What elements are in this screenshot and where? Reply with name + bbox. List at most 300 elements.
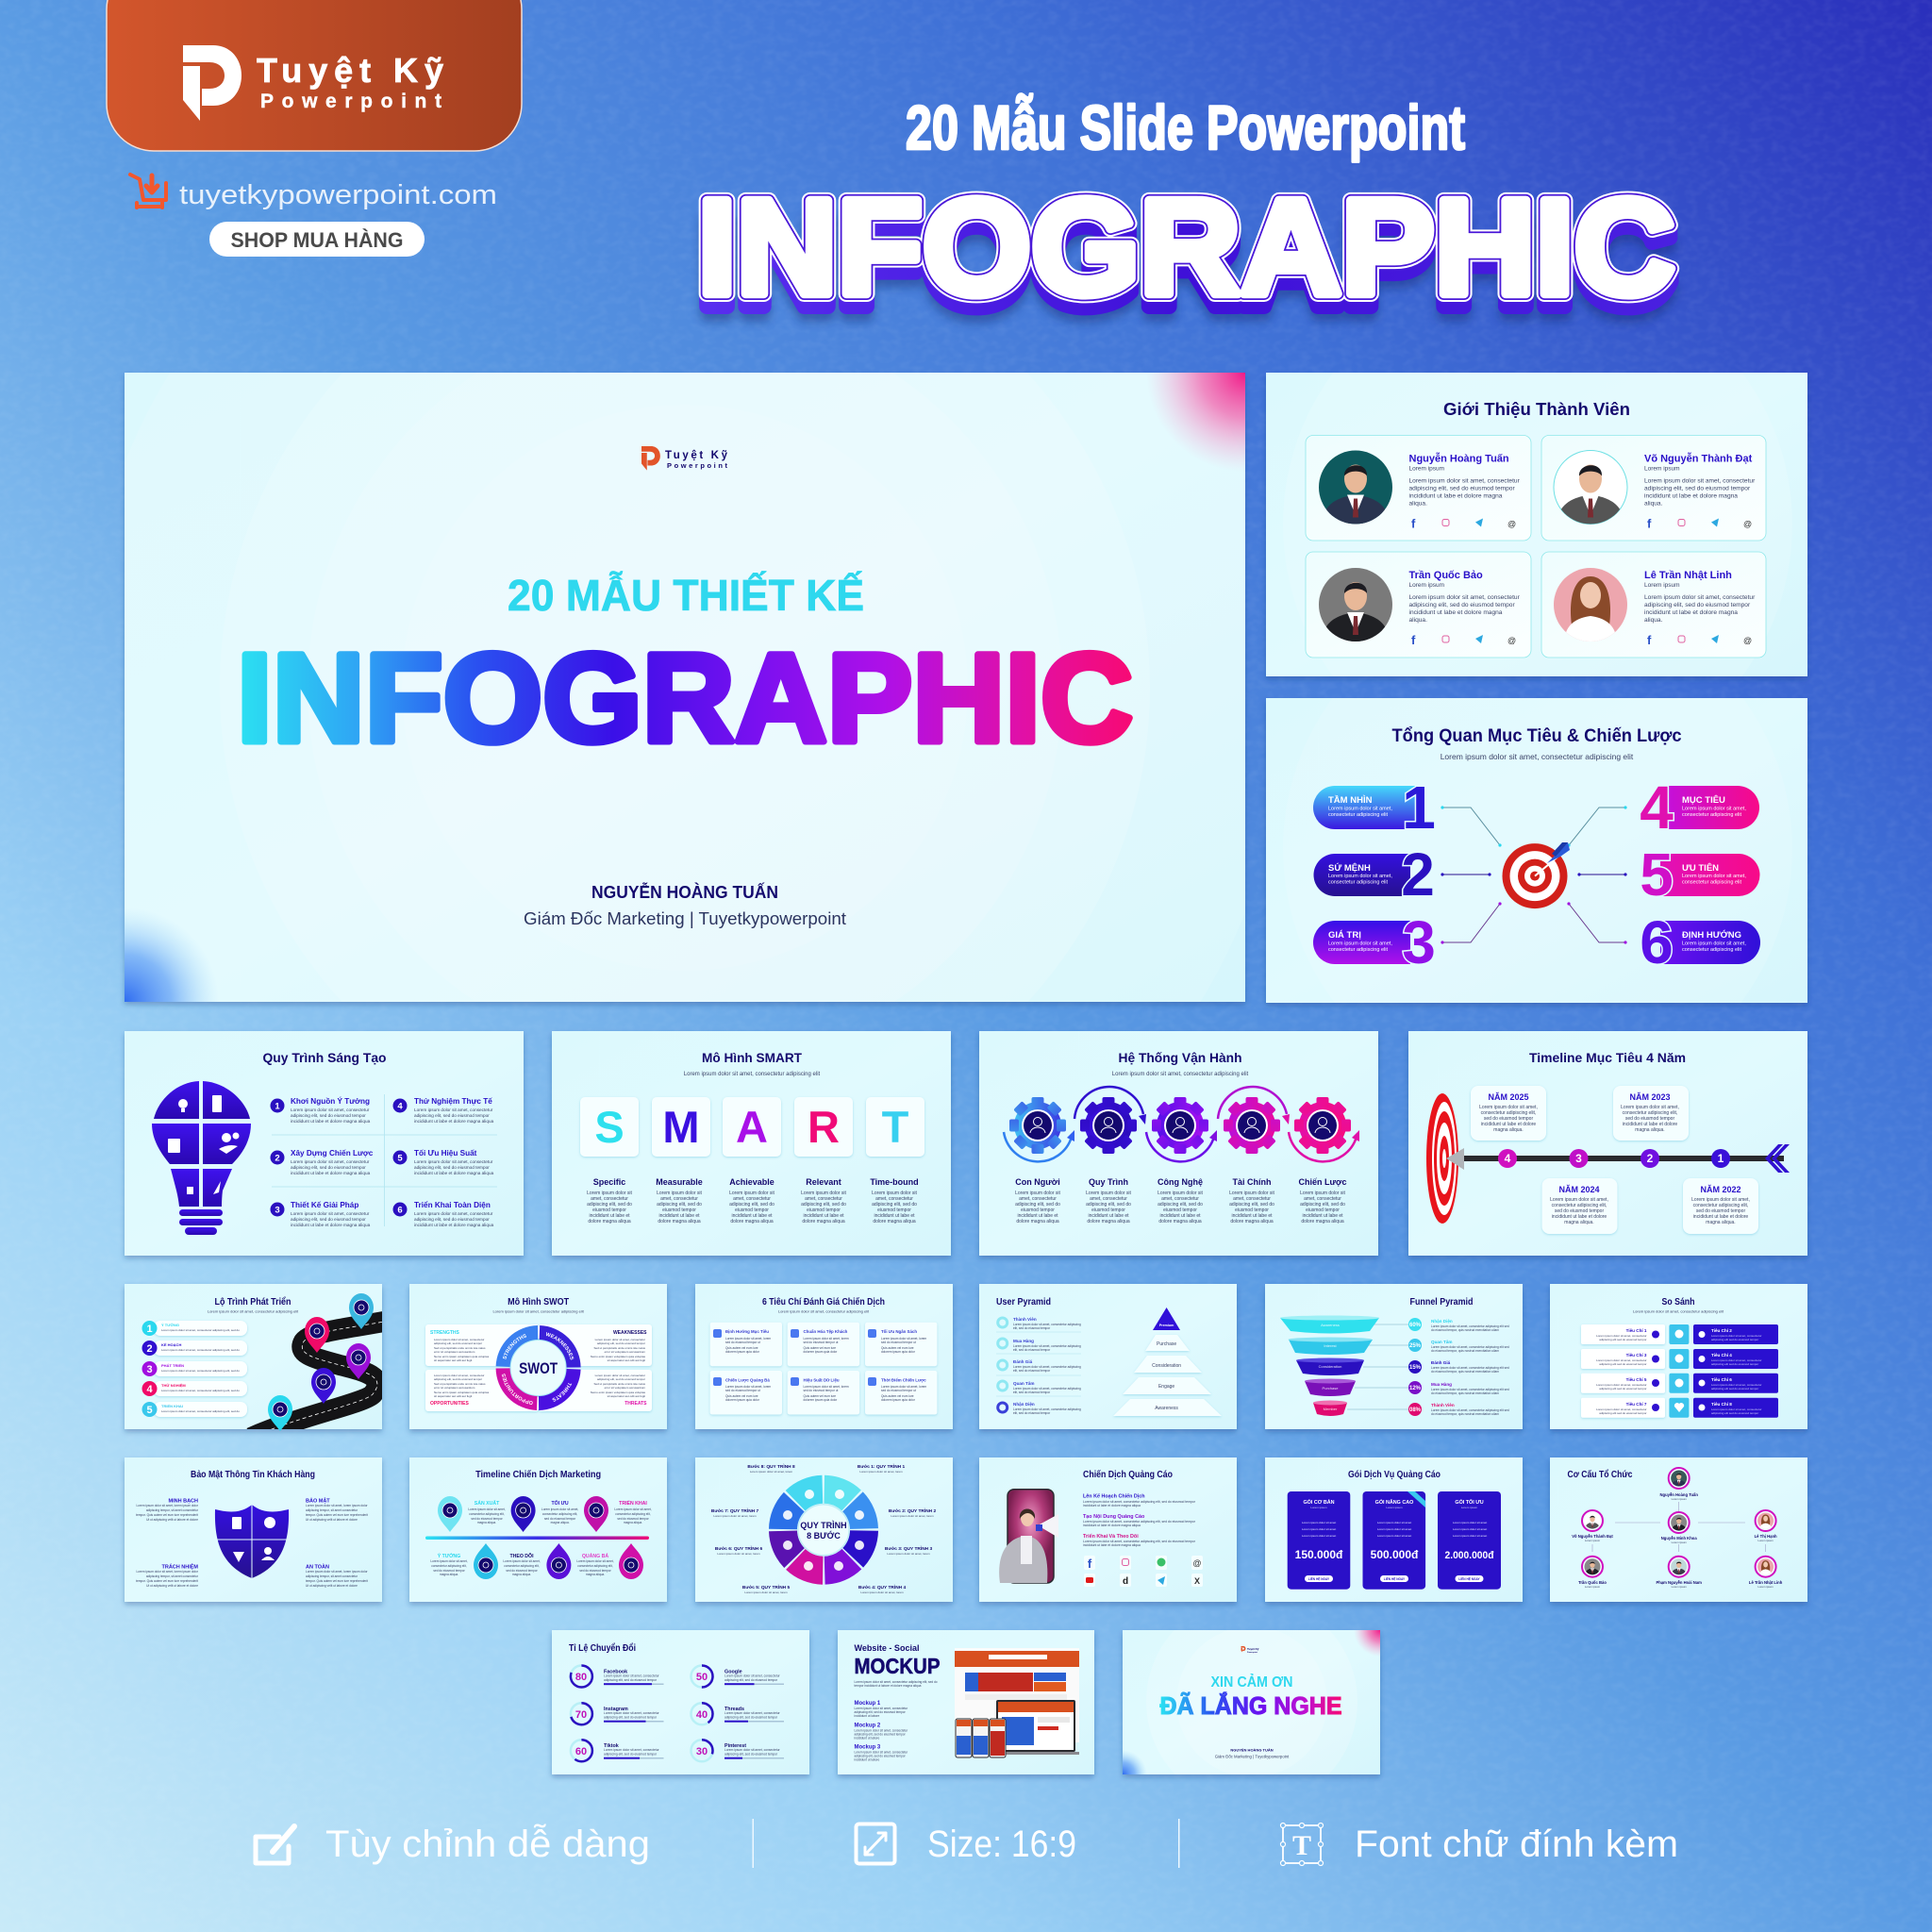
labels: incididunt ut labe et (1017, 1213, 1058, 1219)
device mockups (955, 1648, 1079, 1757)
slide: Gói Dịch Vụ Quảng Cáo (1265, 1457, 1523, 1602)
slide: Mô Hình SWOT: Nemo enim ipsam voluptatem quia voluptas (591, 1391, 645, 1394)
mockup text: Lorem ipsum dolor sit amet, consectetur adipiscing elit, sed do (855, 1680, 938, 1684)
platform labels and bars: Facebook (604, 1670, 627, 1675)
labels: incididunt ut labe et (1088, 1213, 1129, 1219)
ring percentages: 80 (575, 1672, 587, 1683)
criteria cards: dolorem ipsum quia dolor (881, 1350, 916, 1354)
labels: Relevant (806, 1177, 841, 1187)
year cards: magna aliqua. (1564, 1220, 1594, 1225)
ring percentages: 50 (696, 1672, 708, 1683)
letter cards: S (594, 1102, 625, 1152)
pill 2: Sứ mệnh: Lorem ipsum dolor sit amet, (1328, 874, 1392, 879)
criteria cards: Quis autem vel eum iure (881, 1394, 914, 1398)
funnel legend: 60% (1409, 1323, 1422, 1328)
slide: Funnel Pyramid: Funnel Pyramid (1409, 1297, 1474, 1307)
pricing card: Gói Nâng Cao: GÓI NÂNG CAO (1375, 1498, 1413, 1506)
mockup text: Mockup 3 (855, 1745, 881, 1751)
funnel chart (1280, 1315, 1379, 1416)
labels: amet, consectetur (1019, 1196, 1057, 1202)
list: six steps: Lorem ipsum dolor sit amet, consectetur (414, 1108, 493, 1112)
pyramid legend: Lorem ipsum dolor sit amet, consectetur adipiscing (1013, 1344, 1081, 1348)
presenter (1215, 1747, 1290, 1758)
small logo: Powerpoint (1247, 1651, 1257, 1654)
letter cards: M (662, 1102, 700, 1152)
list: six steps: adipiscing elit, sed do eiusmod tempor (414, 1217, 490, 1222)
labels: adipiscing elit, sed do (729, 1202, 774, 1208)
timeline labels: sed do eiusmod tempor (617, 1517, 650, 1521)
chart: SWOT ring: WEAKNESSES (546, 1332, 574, 1360)
comparison rows: Lorem ipsum dolor sit amet, consectetur (1711, 1358, 1761, 1362)
slide: Mô Hình SWOT: error sit voluptatem accusantium (605, 1386, 645, 1390)
comparison rows: adipiscing elit sed do eiusmod tempor (1599, 1338, 1647, 1341)
card: Võ Nguyễn Thành Đạt: Lorem ipsum dolor sit amet, consectetur (1644, 477, 1756, 485)
comparison rows: adipiscing elit sed do eiusmod tempor (1711, 1338, 1758, 1341)
labels: incididunt ut labe et (658, 1213, 700, 1219)
slide: Timeline Chiến Dịch Marketing (409, 1457, 667, 1602)
campaign steps: incididunt ut labe et dolore magna aliqua (1083, 1504, 1141, 1507)
mockup text: incididunt ut labore (855, 1714, 879, 1718)
step list: Lorem ipsum dolor sit amet, consectetur adipiscing elit, sed do (161, 1369, 240, 1373)
pricing card: Gói Nâng Cao: 500.000đ (1371, 1548, 1419, 1561)
pyramid legend: Nhận Diện (1013, 1402, 1035, 1407)
org connectors (1592, 1502, 1766, 1552)
step labels: Bước 2: QUY TRÌNH 2 (889, 1507, 936, 1514)
slide: Mô Hình SWOT: Nemo enim ipsam voluptatem quia voluptas (591, 1355, 645, 1358)
icon: target with arrow (1502, 842, 1570, 908)
card: Nguyễn Hoàng Tuấn: Nguyễn Hoàng Tuấn (1409, 453, 1509, 464)
criteria cards: Tối Ưu Ngân Sách (881, 1329, 917, 1334)
list: six steps: incididunt ut labe et dolore magna aliqua (414, 1223, 494, 1227)
heading: INFOGRAPHIC 3D title: INFOGRAPHIC (698, 176, 1675, 328)
SWOT labels: STRENGTHS (430, 1330, 460, 1336)
icon: resize (857, 1824, 894, 1864)
mockup text: Lorem ipsum dolor sit amet, consectetur (855, 1751, 908, 1755)
slide: Mô Hình SWOT: sit aspernatur aut odit aut fugit (608, 1358, 645, 1362)
chart: eight-step ring: QUY TRÌNH (800, 1521, 847, 1530)
platform labels and bars: Google (724, 1670, 742, 1675)
slide: Mô Hình SWOT: error sit voluptatem accusantium (605, 1350, 645, 1354)
labels: Lorem ipsum dolor sit (1158, 1191, 1204, 1196)
comparison rows: adipiscing elit sed do eiusmod tempor (1599, 1387, 1647, 1391)
labels: amet, consectetur (1233, 1196, 1271, 1202)
step list: 3 (146, 1364, 153, 1375)
labels: amet, consectetur (591, 1196, 628, 1202)
labels: dolore magna aliqua (1158, 1219, 1202, 1224)
heading: 20 Mẫu Slide Powerpoint: 20 Mẫu Slide Powerpoint (906, 92, 1465, 162)
card: Nguyễn Hoàng Tuấn: adipiscing elit, sed do eiusmod tempor (1409, 485, 1515, 492)
pyramid chart: Awareness (1155, 1406, 1178, 1411)
pricing card: Gói Nâng Cao: Lorem ipsum dolor sit amet (1377, 1521, 1411, 1524)
step list: 1 (146, 1324, 153, 1335)
labels: eiusmod tempor (662, 1208, 696, 1213)
labels: Lorem ipsum dolor sit (657, 1191, 703, 1196)
pyramid chart: Premium (1159, 1324, 1174, 1327)
ring percentages: 30 (696, 1746, 708, 1757)
step labels: Bước 7: QUY TRÌNH 7 (711, 1507, 758, 1514)
org names: Nguyễn Minh Khoa (1661, 1536, 1697, 1541)
slide: Lộ Trình Phát Triển (125, 1284, 389, 1438)
list: six steps: adipiscing elit, sed do eiusmod tempor (414, 1165, 490, 1170)
timeline labels: sed do eiusmod tempor (506, 1569, 539, 1573)
mockup text (855, 1680, 938, 1762)
labels: amet, consectetur (1304, 1196, 1341, 1202)
platform labels and bars: Lorem ipsum dolor sit amet, consectetur (604, 1674, 660, 1677)
social icons: @ (1192, 1558, 1202, 1568)
slide: Chiến Dịch Quảng Cáo: Chiến Dịch Quảng Cáo (1083, 1469, 1173, 1480)
list: six steps: Tối Ưu Hiệu Suất (414, 1149, 477, 1158)
list: six steps: incididunt ut labe et dolore magna aliqua (291, 1171, 371, 1175)
security labels: MINH BẠCH (169, 1498, 198, 1504)
criteria cards: sed do eiusmod tempor ut (881, 1341, 916, 1344)
pill 6: Định hướng: ĐỊNH HƯỚNG (1682, 929, 1741, 941)
pricing card: Gói Nâng Cao: LIÊN HỆ NGAY (1384, 1576, 1406, 1581)
slide: Mô Hình SMART: Lorem ipsum dolor sit amet, consectetur adipiscing elit (684, 1072, 821, 1077)
SWOT bullets: Lorem ipsum dolor sit amet, consectetur (434, 1374, 484, 1377)
labels: Lorem ipsum dolor sit (1086, 1191, 1132, 1196)
funnel chart: Consideration (1319, 1364, 1341, 1369)
card: Võ Nguyễn Thành Đạt: Lorem ipsum (1644, 466, 1680, 472)
slide: Timeline Chiến Dịch Marketing: Timeline Chiến Dịch Marketing (475, 1469, 601, 1480)
card: Trần Quốc Bảo: Lorem ipsum dolor sit amet, consectetur (1409, 594, 1521, 601)
funnel legend: Quan Tâm (1431, 1340, 1452, 1344)
org names: Phạm Nguyễn Hoài Nam (1656, 1580, 1702, 1585)
labels: dolore magna aliqua (873, 1219, 916, 1224)
social icons: f (1088, 1557, 1092, 1571)
pill 5: Ưu tiên: Lorem ipsum dolor sit amet, (1682, 874, 1746, 879)
pill 5: Ưu tiên: 5 (1640, 841, 1674, 908)
criteria cards: Thời Điểm Chiến Lược (881, 1377, 926, 1383)
comparison rows: Tiêu Chí 5 (1626, 1377, 1647, 1382)
slide: 6 Tiêu Chí Đánh Giá Chiến Dịch: Lorem ipsum dolor sit amet, consectetur adipiscing elit (778, 1309, 870, 1313)
divider (753, 1819, 754, 1868)
labels: eiusmod tempor (877, 1208, 911, 1213)
platform labels and bars: Threads (724, 1707, 744, 1712)
comparison rows: Lorem ipsum dolor sit amet, consectetur (1711, 1383, 1761, 1387)
labels: eiusmod tempor (1091, 1208, 1125, 1213)
feature: Size 16:9 (857, 1824, 1076, 1865)
year cards: sed do eiusmod tempor (1484, 1116, 1533, 1122)
mockup text: adipiscing elit, sed do eiusmod tempor (855, 1710, 907, 1714)
timeline labels: magna aliqua. (440, 1573, 458, 1576)
year cards: incididunt ut labe et dolore (1552, 1214, 1607, 1220)
slide: User Pyramid (979, 1284, 1237, 1429)
list: six steps: adipiscing elit, sed do eiusmod tempor (291, 1165, 366, 1170)
slide: Tỉ Lệ Chuyển Đổi: Tỉ Lệ Chuyển Đổi (569, 1642, 636, 1654)
funnel legend: do eiusmod tempor, quis nostrud exercitation ullam (1431, 1370, 1499, 1374)
timeline labels: Lorem ipsum dolor sit amet, (541, 1507, 578, 1511)
list: six steps: Triển Khai Toàn Diện (414, 1200, 491, 1209)
funnel chart: Purchase (1323, 1386, 1339, 1391)
slide: Mô Hình SWOT: sit aspernatur aut odit aut fugit (608, 1394, 645, 1398)
platform labels and bars: adipiscing elit, sed do eiusmod tempor (724, 1678, 778, 1682)
pill 3: Giá trị: Lorem ipsum dolor sit amet, (1328, 941, 1392, 947)
SWOT bullets: Sed ut perspiciatis unde omnis iste natus (434, 1346, 486, 1350)
comparison rows: Lorem ipsum dolor sit amet, consectetur (1596, 1358, 1647, 1362)
campaign steps: incididunt ut labe et dolore magna aliqua (1083, 1543, 1141, 1547)
pill 6: Định hướng: consectetur adipiscing elit (1682, 947, 1741, 953)
pricing card: Gói Cơ Bản (1288, 1491, 1350, 1590)
comparison rows: Tiêu Chí 4 (1711, 1353, 1732, 1357)
platform labels and bars: adipiscing elit, sed do eiusmod tempor (724, 1715, 778, 1719)
slide: Xin Cảm Ơn (1121, 1630, 1383, 1779)
labels: dolore magna aliqua (1016, 1219, 1059, 1224)
small logo (641, 446, 728, 471)
funnel legend: Thành Viên (1431, 1403, 1455, 1407)
funnel legend (1408, 1318, 1509, 1416)
labels: incididunt ut labe et (589, 1213, 630, 1219)
pyramid legend: Quan Tâm (1013, 1381, 1034, 1386)
arrow timeline: 3 (1575, 1152, 1582, 1165)
comparison rows: Lorem ipsum dolor sit amet, consectetur (1596, 1383, 1647, 1387)
slide: Lộ Trình Phát Triển: Lộ Trình Phát Triển (215, 1296, 291, 1307)
campaign steps: incididunt ut labe et dolore magna aliqua (1083, 1524, 1141, 1527)
pyramid legend: Thành Viên (1013, 1317, 1037, 1322)
pill 1: Tầm nhìn (1313, 774, 1436, 841)
logo subtitle: Powerpoint (260, 91, 441, 112)
pricing card: Gói Nâng Cao: Lorem ipsum dolor sit amet (1377, 1534, 1411, 1538)
connector lines (1347, 1324, 1415, 1409)
labels: Specific (593, 1177, 625, 1187)
pill 3: Giá trị: GIÁ TRỊ (1328, 930, 1361, 941)
org names: Trần Quốc Bảo (1578, 1580, 1607, 1585)
slide: So Sánh: So Sánh (1662, 1297, 1694, 1307)
winding road (251, 1321, 389, 1438)
small logo: Powerpoint (667, 461, 728, 470)
pill 6: Định hướng (1640, 908, 1760, 976)
labels: adipiscing elit, sed do (1015, 1202, 1060, 1208)
security labels: tempor. Quis autem vel eum iure reprehenderit (136, 1513, 198, 1517)
slide: Mô Hình SWOT: Lorem ipsum dolor sit amet, consectetur (595, 1338, 645, 1341)
card: Lê Trần Nhật Linh (1541, 552, 1766, 658)
criteria cards: dolorem ipsum quia dolor (804, 1350, 838, 1354)
labels: incididunt ut labe et (874, 1213, 915, 1219)
org names: Lorem ipsum (1672, 1541, 1687, 1544)
letter cards: T (882, 1102, 909, 1152)
list: six steps: Lorem ipsum dolor sit amet, consectetur (291, 1108, 370, 1112)
social icons: X (1194, 1576, 1200, 1586)
SWOT bullets: adipiscing elit, sed do eiusmod tempor (434, 1341, 482, 1345)
timeline labels: consectetur adipiscing elit, (615, 1512, 651, 1516)
list: six steps: 5 (397, 1153, 403, 1164)
campaign steps: Lorem ipsum dolor sit amet, consectetur adipiscing elit, sed do eiusmod tempor (1083, 1520, 1196, 1524)
security labels: adipiscing tempor, sit amet consectetur (306, 1574, 358, 1578)
pill 4: Mục tiêu (1640, 774, 1759, 841)
org names (1572, 1492, 1783, 1589)
campaign steps (1083, 1492, 1196, 1547)
list: six steps: Lorem ipsum dolor sit amet, consectetur (414, 1159, 493, 1164)
slide: Chiến Dịch Quảng Cáo (979, 1457, 1237, 1602)
arrow timeline: 4 (1505, 1152, 1511, 1165)
comparison rows: Lorem ipsum dolor sit amet, consectetur (1711, 1334, 1761, 1338)
small logo (1241, 1646, 1259, 1654)
slide: Bảo Mật Thông Tin Khách Hàng: Bảo Mật Thông Tin Khách Hàng (191, 1470, 315, 1480)
chart: SWOT ring: THREATS (553, 1383, 572, 1402)
step list: THỬ NGHIỆM (161, 1383, 186, 1388)
labels: dolore magna aliqua (730, 1219, 774, 1224)
comparison rows: Lorem ipsum dolor sit amet, consectetur (1711, 1407, 1761, 1411)
org names: Lê Trần Nhật Linh (1749, 1580, 1783, 1585)
card: Võ Nguyễn Thành Đạt: incididunt ut labe et dolore magna (1644, 492, 1738, 500)
comparison rows: Lorem ipsum dolor sit amet, consectetur (1596, 1407, 1647, 1411)
funnel legend: Lorem ipsum dolor sit amet, consectetur adipiscing elit sed (1431, 1408, 1509, 1412)
labels: eiusmod tempor (1021, 1208, 1055, 1213)
pricing card: Gói Cơ Bản: GÓI CƠ BẢN (1303, 1498, 1335, 1506)
timeline labels: consectetur adipiscing elit, (431, 1564, 467, 1568)
SWOT bullets: adipiscing elit, sed do eiusmod tempor (434, 1377, 482, 1381)
pyramid legend: Lorem ipsum dolor sit amet, consectetur adipiscing (1013, 1365, 1081, 1369)
list: six steps: 6 (397, 1206, 403, 1215)
SWOT bullets: Nemo enim ipsam voluptatem quia voluptas (434, 1391, 490, 1394)
shop button (209, 222, 425, 257)
chart: SWOT ring: SWOT (519, 1359, 558, 1377)
criteria cards: Lorem ipsum dolor sit amet, lorem (881, 1337, 927, 1341)
arrow timeline: 2 (1647, 1152, 1654, 1165)
labels: amet, consectetur (805, 1196, 842, 1202)
card: Nguyễn Hoàng Tuấn (1306, 436, 1531, 541)
white SWOT cards (425, 1324, 652, 1411)
card: Lê Trần Nhật Linh: incididunt ut labe et dolore magna (1644, 609, 1738, 616)
step list: Lorem ipsum dolor sit amet, consectetur adipiscing elit, sed do (161, 1409, 240, 1413)
campaign steps: Lorem ipsum dolor sit amet, consectetur adipiscing elit, sed do eiusmod tempor (1083, 1500, 1196, 1504)
labels: Lorem ipsum dolor sit (1300, 1191, 1346, 1196)
pill 2: Sứ mệnh: 2 (1401, 841, 1435, 908)
labels (1015, 1177, 1346, 1224)
labels: dolore magna aliqua (588, 1219, 631, 1224)
platform labels and bars: Lorem ipsum dolor sit amet, consectetur (724, 1748, 781, 1752)
criteria cards: Chiến Lược Quảng Bá (725, 1377, 770, 1383)
list: six steps: 1 (275, 1102, 280, 1111)
timeline labels: SẢN XUẤT (475, 1500, 500, 1507)
slide: Lộ Trình Phát Triển: Lorem ipsum dolor sit amet, consectetur adipiscing elit (208, 1309, 299, 1313)
pricing card: Gói Cơ Bản: Lorem ipsum dolor sit amet (1302, 1521, 1336, 1524)
card: Lê Trần Nhật Linh: adipiscing elit, sed do eiusmod tempor (1644, 602, 1751, 608)
platform labels and bars: adipiscing elit, sed do eiusmod tempor (604, 1678, 658, 1682)
list: six steps: adipiscing elit, sed do eiusmod tempor (291, 1217, 366, 1222)
icon: segmented light bulb (152, 1081, 251, 1235)
year cards: sed do eiusmod tempor (1555, 1208, 1604, 1214)
presenter: NGUYỄN HOÀNG TUẤN (1230, 1747, 1274, 1753)
step labels: Lorem ipsum dolor sit amet, lorem (750, 1470, 793, 1474)
SWOT bullets: Nemo enim ipsam voluptatem quia voluptas (434, 1355, 490, 1358)
campaign steps: Tạo Nội Dung Quảng Cáo (1083, 1514, 1145, 1520)
timeline labels: TRIỂN KHAI (619, 1500, 647, 1507)
slide: 6 Tiêu Chí Đánh Giá Chiến Dịch: 6 Tiêu Chí Đánh Giá Chiến Dịch (762, 1296, 885, 1307)
security labels: Lorem ipsum dolor sit amet, lorem ipsum dolor (306, 1504, 368, 1507)
icon: side target (1426, 1093, 1458, 1224)
year cards: NĂM 2025 (1488, 1092, 1529, 1102)
labels: dolore magna aliqua (1301, 1219, 1344, 1224)
step labels: Lorem ipsum dolor sit amet, lorem (891, 1514, 934, 1518)
mockup text: incididunt ut labore (855, 1736, 879, 1740)
slide: Bảo Mật Thông Tin Khách Hàng (125, 1457, 382, 1602)
platform labels and bars: Lorem ipsum dolor sit amet, consectetur (604, 1748, 660, 1752)
hero subtitle: 20 MẪU THIẾT KẾ (508, 571, 864, 620)
campaign steps: Lên Kế Hoạch Chiến Dịch (1083, 1492, 1145, 1500)
pyramid legend: elit, sed do eiusmod tempor (1013, 1369, 1051, 1373)
criteria cards: dolorem ipsum quia dolor (881, 1398, 916, 1402)
presenter: Giám Đốc Marketing | Tuyetkypowerpoint (1215, 1755, 1290, 1758)
feature: Font chữ đính kèm: Font chữ đính kèm (1355, 1824, 1678, 1865)
security labels: Lorem ipsum dolor sit amet, lorem ipsum dolor (136, 1504, 199, 1507)
SWOT labels: THREATS (625, 1401, 647, 1407)
platform labels and bars: Instagram (604, 1707, 628, 1712)
labels: amet, consectetur (660, 1196, 698, 1202)
labels: adipiscing elit, sed do (1158, 1202, 1203, 1208)
criteria cards: Quis autem vel eum iure (725, 1346, 758, 1350)
labels: Lorem ipsum dolor sit (801, 1191, 847, 1196)
labels: Chiến Lược (1299, 1177, 1346, 1187)
logo wordmark: Tuyệt Kỹ (257, 51, 443, 90)
step list: 5 (146, 1405, 153, 1416)
card: Võ Nguyễn Thành Đạt: adipiscing elit, sed do eiusmod tempor (1644, 485, 1751, 492)
funnel chart: Member (1324, 1407, 1338, 1411)
letter cards: R (808, 1102, 840, 1152)
step labels: Bước 3: QUY TRÌNH 3 (885, 1544, 932, 1552)
slide: Mô Hình SMART (552, 1031, 951, 1256)
SWOT labels: WEAKNESSES (613, 1330, 647, 1336)
pill 4: Mục tiêu: MỤC TIÊU (1682, 794, 1725, 806)
funnel legend: Lorem ipsum dolor sit amet, consectetur adipiscing elit sed (1431, 1324, 1509, 1328)
platform labels and bars: Lorem ipsum dolor sit amet, consectetur (724, 1711, 781, 1715)
labels: incididunt ut labe et (803, 1213, 844, 1219)
slide: Mô Hình SWOT: adipiscing elit, sed do eiusmod tempor (597, 1341, 645, 1345)
funnel legend: Nhận Diện (1431, 1319, 1453, 1324)
platform labels and bars: Tiktok (604, 1743, 619, 1749)
panel: Tổng Quan Mục Tiêu & Chiến Lược (1264, 698, 1809, 1008)
hero title: INFOGRAPHIC (237, 628, 1133, 769)
pyramid legend: elit, sed do eiusmod tempor (1013, 1326, 1051, 1330)
step labels: Bước 1: QUY TRÌNH 1 (858, 1462, 905, 1470)
slide: So Sánh (1550, 1284, 1807, 1429)
card: Trần Quốc Bảo: Trần Quốc Bảo (1409, 570, 1483, 581)
org names: Nguyễn Hoàng Tuấn (1659, 1492, 1698, 1497)
pill 5: Ưu tiên: ƯU TIÊN (1682, 862, 1719, 874)
labels: eiusmod tempor (807, 1208, 841, 1213)
year cards: NĂM 2024 (1558, 1185, 1600, 1194)
pyramid legend: elit, sed do eiusmod tempor (1013, 1411, 1051, 1415)
criteria cards: dolorem ipsum quia dolor (725, 1350, 760, 1354)
criteria cards: Định Hướng Mục Tiêu (725, 1329, 769, 1334)
security labels: tempor. Quis autem vel eum iure reprehenderit (306, 1513, 368, 1517)
timeline labels: sed do eiusmod tempor (544, 1517, 576, 1521)
presenter role: Giám Đốc Marketing | Tuyetkypowerpoint (524, 909, 846, 928)
step list: 2 (146, 1343, 153, 1355)
gear row (1004, 1087, 1359, 1161)
card: Lê Trần Nhật Linh: @ (1743, 636, 1752, 645)
timeline labels: Lorem ipsum dolor sit amet, (614, 1507, 652, 1511)
heading: INFOGRAPHIC 3D title: INFOGRAPHIC (698, 172, 1675, 323)
small logo: Tuyệt Kỹ (1247, 1647, 1259, 1651)
connector lines (1441, 806, 1627, 944)
platform labels and bars: Lorem ipsum dolor sit amet, consectetur (724, 1674, 781, 1677)
timeline labels: Lorem ipsum dolor sit amet, (576, 1559, 614, 1563)
timeline labels (430, 1500, 652, 1576)
step labels: Bước 4: QUY TRÌNH 4 (858, 1583, 906, 1591)
pricing card: Gói Tối Ưu (1438, 1491, 1501, 1590)
security labels (136, 1498, 368, 1588)
list: six steps: Lorem ipsum dolor sit amet, consectetur (414, 1211, 493, 1216)
slide: Mô Hình SWOT: Lorem ipsum dolor sit amet, consectetur (595, 1374, 645, 1377)
slide: Funnel Pyramid (1265, 1284, 1523, 1429)
criteria cards: Hiệu Suất Dữ Liệu (804, 1377, 840, 1383)
criteria cards: sed do eiusmod tempor ut (725, 1389, 760, 1392)
criteria cards: dolorem ipsum quia dolor (804, 1398, 838, 1402)
card: Võ Nguyễn Thành Đạt: f (1647, 517, 1652, 530)
funnel legend: 25% (1409, 1343, 1422, 1349)
step list: Lorem ipsum dolor sit amet, consectetur adipiscing elit, sed do (161, 1389, 240, 1392)
slide: Mô Hình SWOT: Mô Hình SWOT (508, 1297, 569, 1307)
